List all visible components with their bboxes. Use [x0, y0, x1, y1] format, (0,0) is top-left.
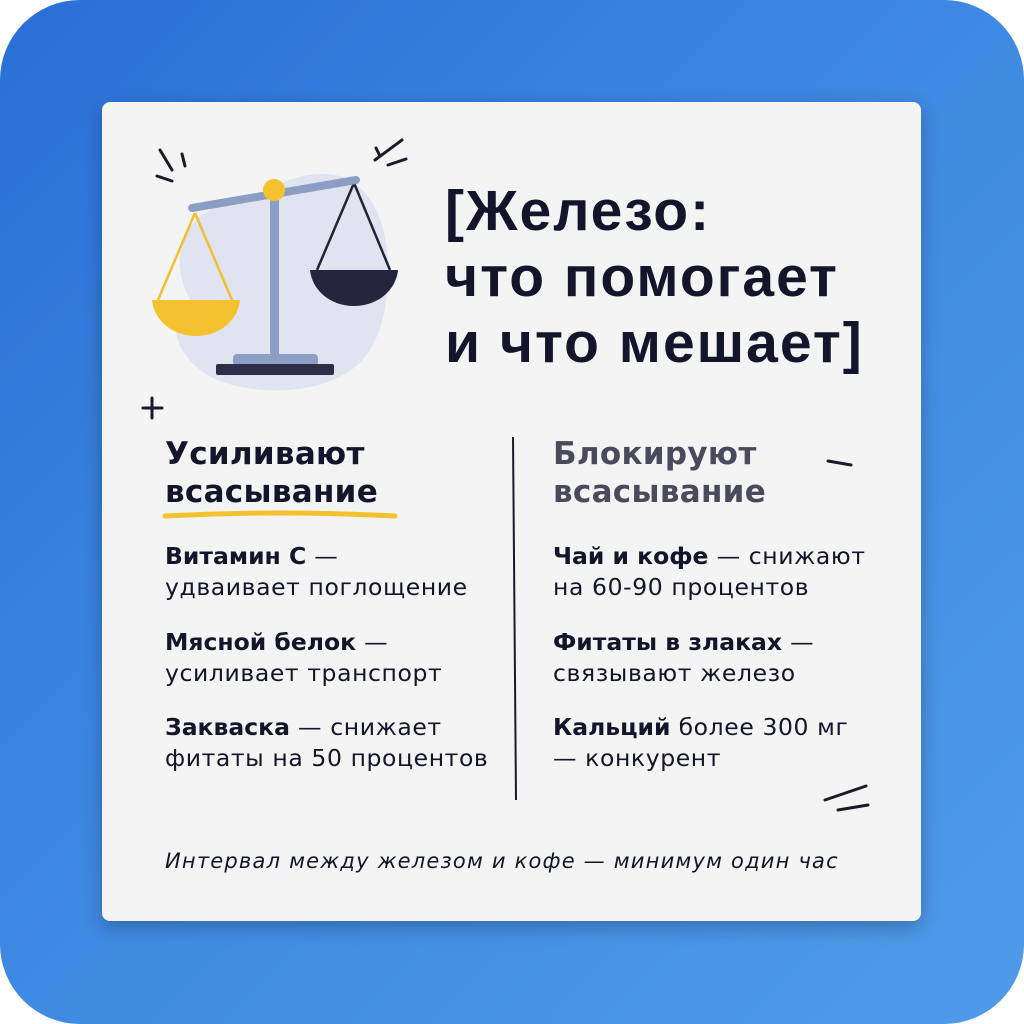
list: enhance: удваивает поглощение — [165, 573, 468, 601]
title — [445, 179, 864, 375]
title: и что мешает] — [445, 311, 864, 375]
list: block: Фитаты в злаках — — [553, 628, 814, 656]
list: block: — конкурент — [553, 744, 721, 772]
list: block: на 60-90 процентов — [553, 573, 809, 601]
list: block — [553, 542, 866, 772]
list: enhance: Витамин С — — [165, 542, 338, 570]
list: block: связывают железо — [553, 659, 796, 687]
divider — [513, 437, 516, 800]
heading: enhance: всасывание — [165, 474, 378, 510]
list: enhance: фитаты на 50 процентов — [165, 744, 488, 772]
footer note: Интервал между железом и кофе — минимум один час — [165, 849, 839, 873]
list: enhance: усиливает транспорт — [165, 659, 442, 687]
list: enhance — [165, 542, 488, 772]
card — [102, 102, 921, 921]
heading: block: Блокируют — [553, 436, 757, 472]
title: [Железо: — [445, 179, 711, 243]
heading: enhance — [165, 436, 378, 510]
list: enhance: Закваска — снижает — [165, 713, 442, 741]
heading: block: всасывание — [553, 474, 766, 510]
heading: block — [553, 436, 766, 510]
underline — [165, 513, 395, 516]
list: enhance: Мясной белок — — [165, 628, 388, 656]
title: что помогает — [445, 245, 839, 309]
list: block: Чай и кофе — снижают — [553, 542, 866, 570]
list: block: Кальций более 300 мг — [553, 713, 848, 741]
heading: enhance: Усиливают — [165, 436, 365, 472]
